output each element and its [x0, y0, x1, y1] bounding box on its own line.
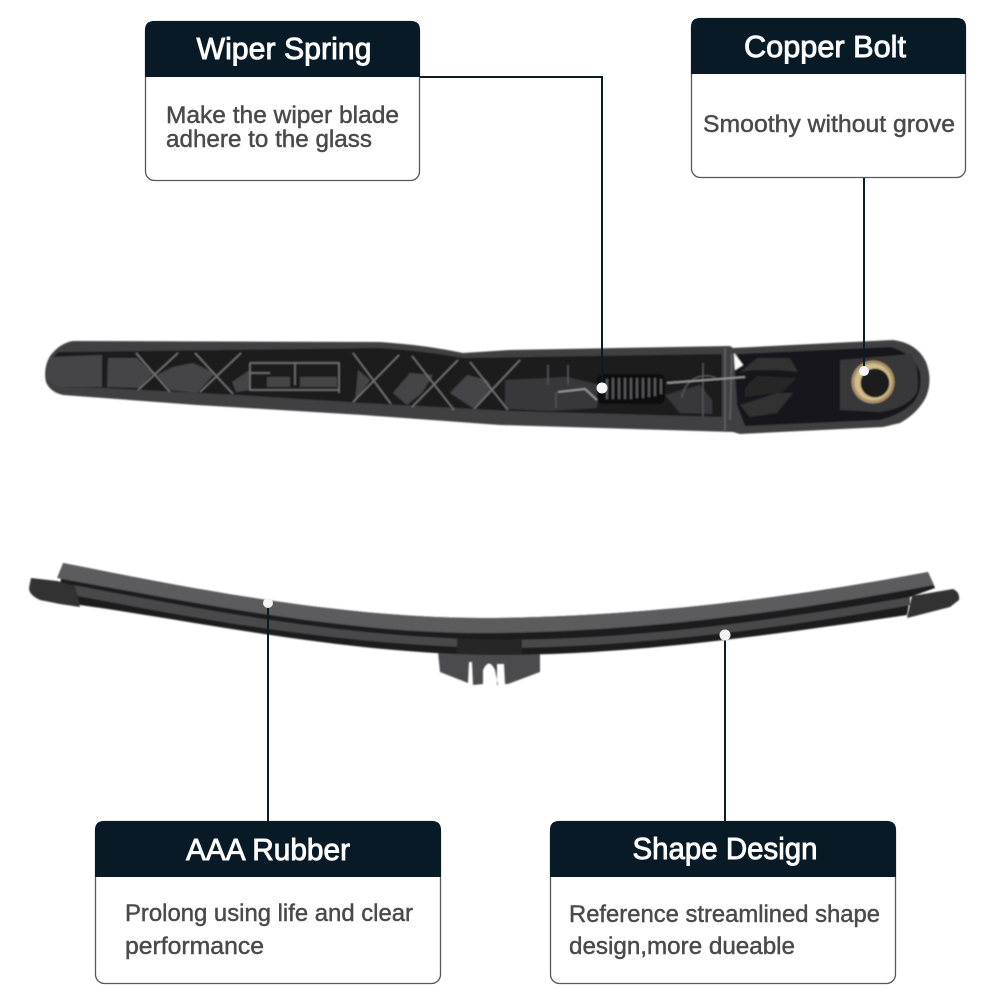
left end cap	[29, 578, 80, 607]
blade centre collar	[457, 639, 522, 655]
spring coil	[558, 374, 745, 404]
arm ribs	[136, 348, 732, 430]
panel: copper bolt: Copper Bolt	[744, 29, 906, 64]
panel: AAA rubber: Prolong using life and clear	[125, 900, 413, 927]
blade lower stripe	[73, 585, 910, 648]
leader: copper bolt	[859, 177, 869, 376]
panel: wiper spring: Wiper Spring	[196, 31, 372, 66]
copper bushing	[852, 360, 894, 404]
panel: wiper spring	[145, 21, 420, 180]
wiper arm	[45, 340, 930, 434]
wiper blade	[29, 563, 959, 685]
arm inner channel	[49, 348, 722, 417]
right end cap	[907, 589, 959, 618]
arm centre pockets	[505, 354, 918, 417]
blade top rubber	[57, 563, 934, 633]
panel: AAA rubber	[95, 821, 441, 984]
panel: AAA rubber: AAA Rubber	[186, 832, 350, 867]
leader: shape design	[720, 630, 730, 821]
leader: AAA rubber	[263, 598, 273, 821]
panel: shape design: Shape Design	[632, 831, 818, 866]
panel: copper bolt: Smoothy without grove	[703, 111, 955, 138]
panel: shape design: design,more dueable	[569, 933, 795, 960]
arm gap highlight	[734, 353, 743, 370]
leader: wiper spring	[420, 77, 608, 394]
panel: wiper spring: adhere to the glass	[166, 126, 372, 153]
panel: AAA rubber: performance	[125, 933, 264, 960]
panel: shape design	[550, 821, 896, 984]
blade mount clip	[438, 652, 540, 685]
arm pockets	[48, 355, 493, 408]
panel: copper bolt	[691, 18, 966, 178]
panel: wiper spring: Make the wiper blade	[166, 102, 399, 129]
panel: shape design: Reference streamlined shape	[569, 901, 880, 928]
arm end cap section	[735, 347, 921, 426]
blade body	[60, 563, 935, 655]
